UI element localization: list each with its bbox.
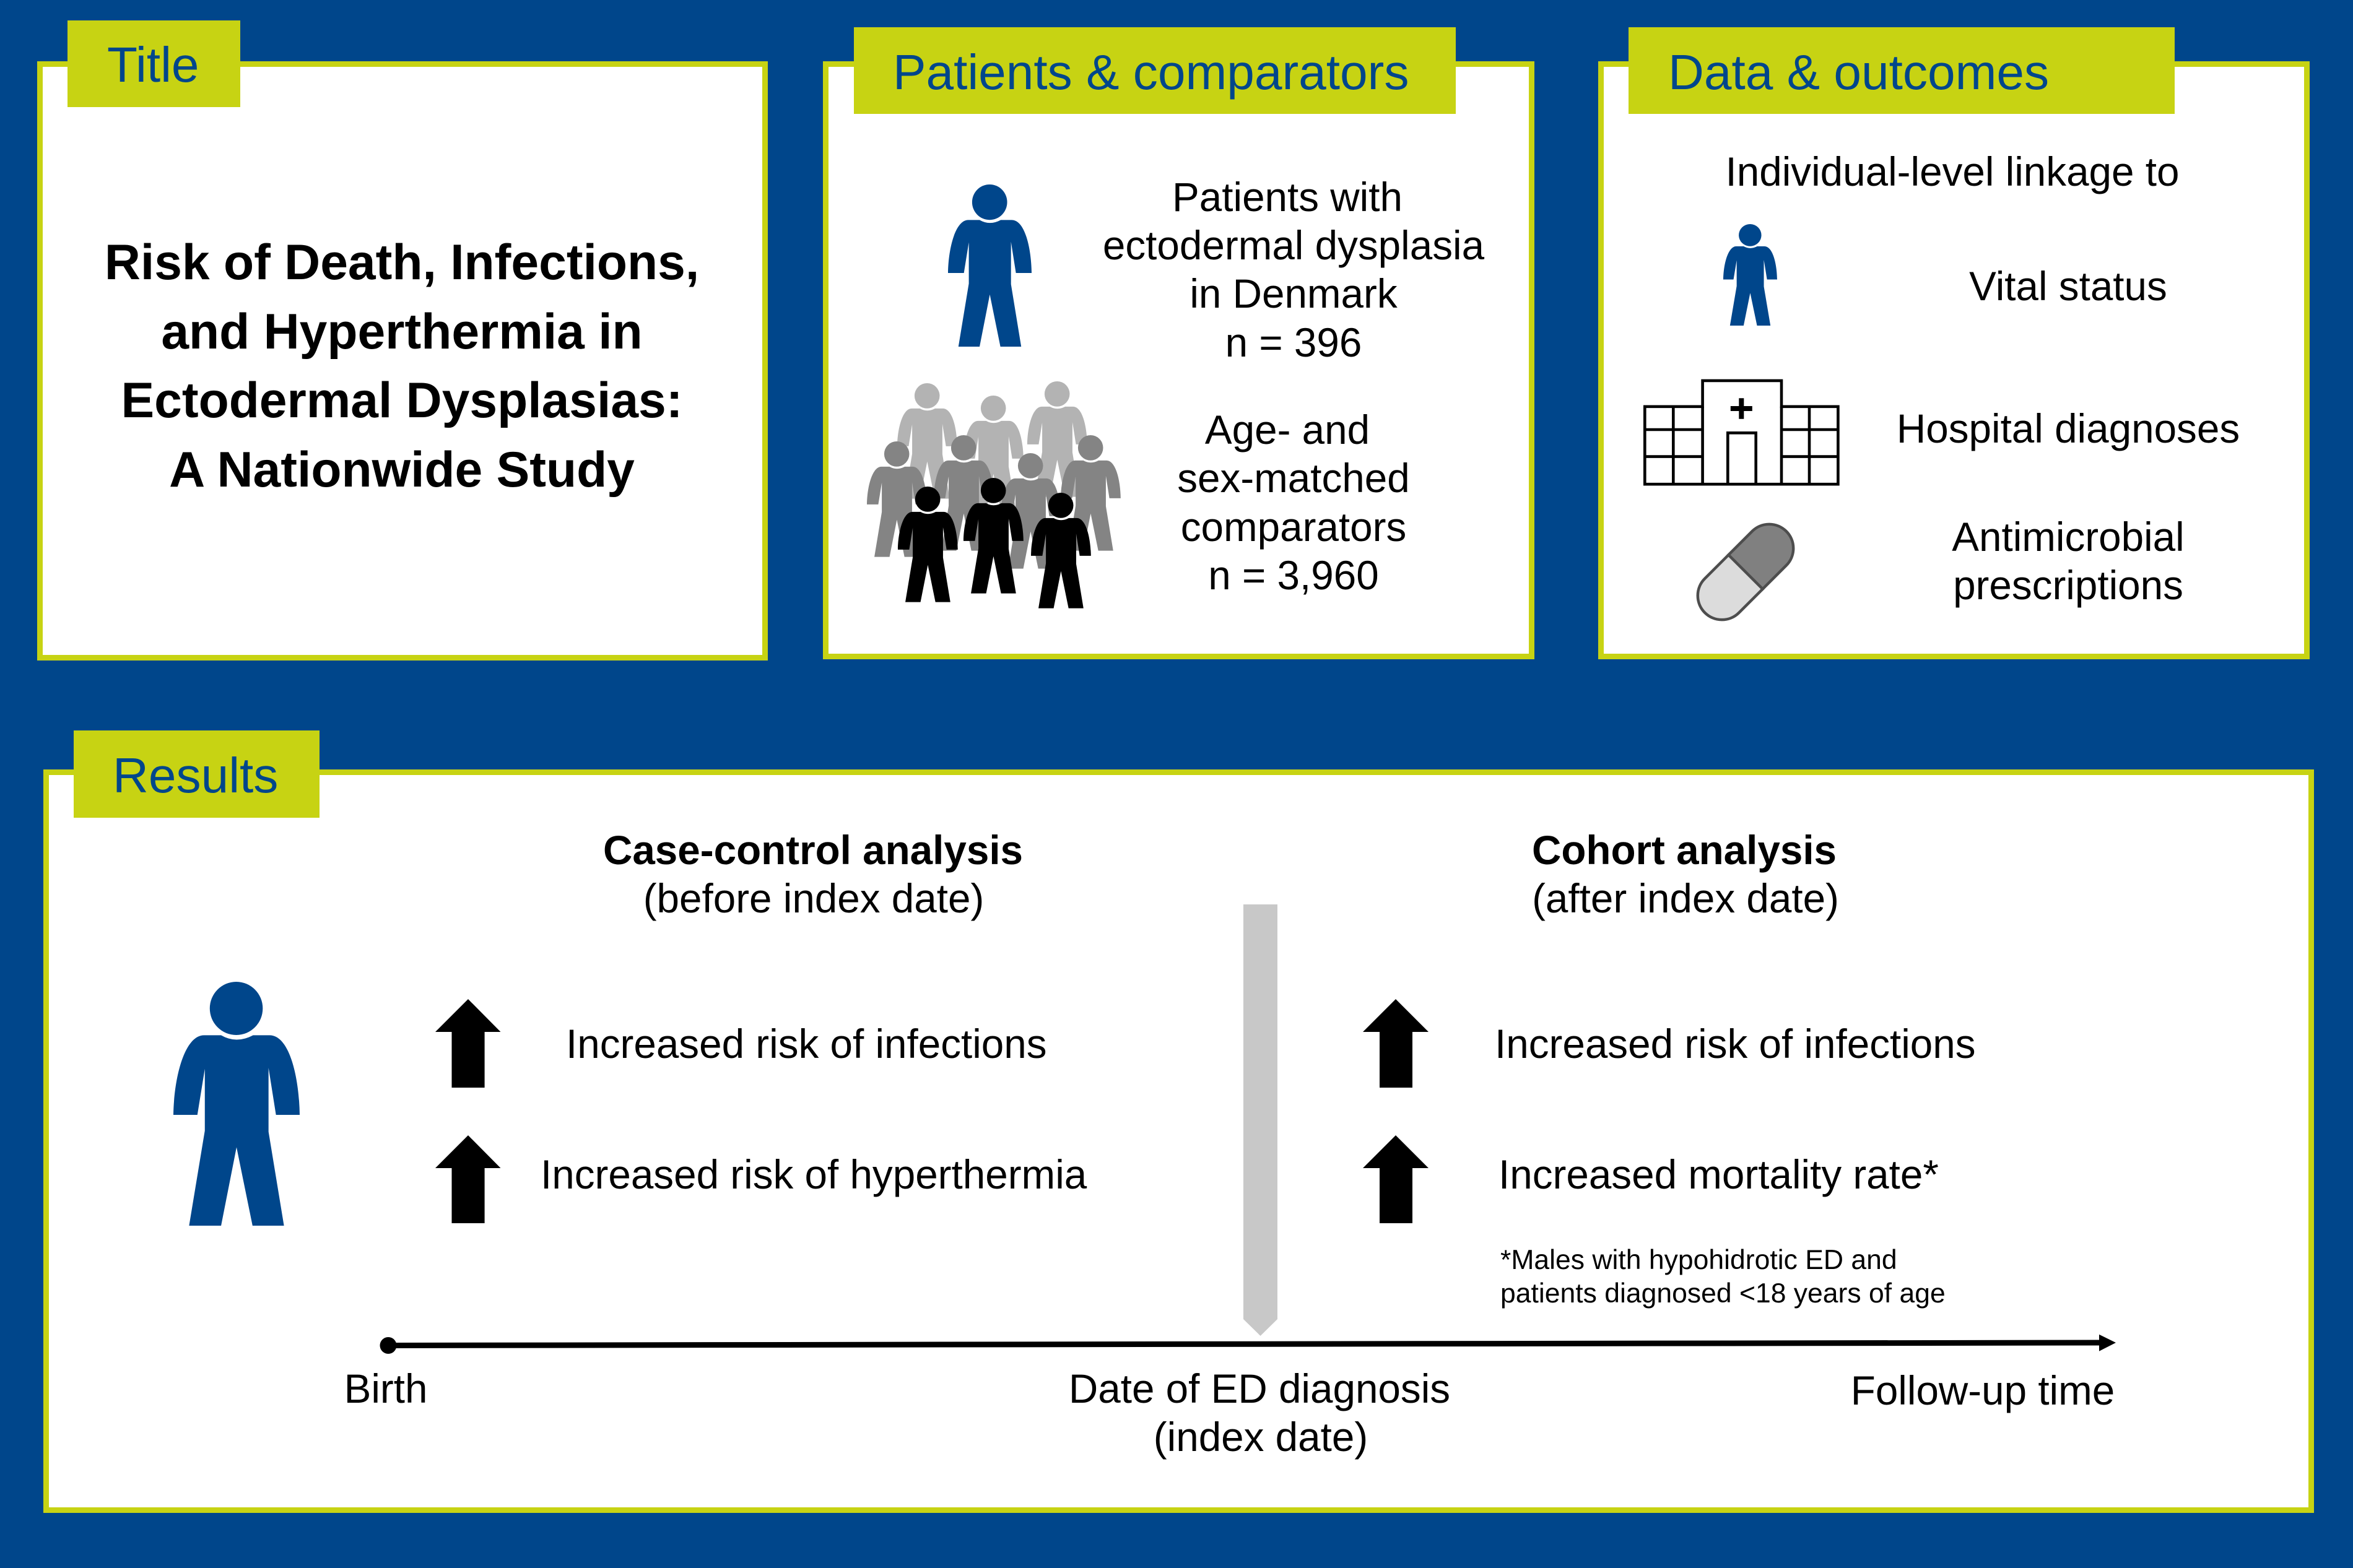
footnote <box>1500 1245 1946 1309</box>
tab: results <box>74 730 320 818</box>
timeline label: index date <box>1069 1366 1450 1460</box>
result: mortality after index: Increased mortality rate* <box>1498 1152 1939 1197</box>
linkage heading: Individual-level linkage to <box>1726 149 2179 194</box>
study title: Ectodermal Dysplasias: <box>121 373 683 428</box>
heading: case-control analysis: Case-control analysis <box>603 828 1023 873</box>
tab: patients and comparators <box>854 27 1456 114</box>
icon: comparator crowd <box>867 381 1121 609</box>
panel: results <box>46 730 2311 1510</box>
timeline label: birth: Birth <box>344 1366 427 1411</box>
tab: data and outcomes <box>1629 27 2175 114</box>
tab: results: Results <box>113 747 278 803</box>
arrow: infections before index <box>435 999 500 1088</box>
footnote: *Males with hypohidrotic ED and <box>1500 1245 1897 1275</box>
hospital diagnoses label: Hospital diagnoses <box>1897 406 2240 451</box>
antimicrobial prescriptions label: prescriptions <box>1953 563 2183 608</box>
footnote: patients diagnosed <18 years of age <box>1500 1278 1946 1309</box>
patients text <box>1103 175 1485 365</box>
timeline label: index date: Date of ED diagnosis <box>1069 1366 1450 1411</box>
icon: patient <box>173 982 300 1226</box>
patients text: n = 396 <box>1225 320 1362 365</box>
tab: title <box>67 20 240 107</box>
timeline label: follow-up: Follow-up time <box>1851 1368 2115 1413</box>
result: infections after index: Increased risk of infections <box>1495 1021 1976 1067</box>
panel: patients and comparators <box>826 27 1532 656</box>
tab: data and outcomes: Data & outcomes <box>1668 44 2049 100</box>
tab: title: Title <box>107 37 199 92</box>
comparators text: n = 3,960 <box>1208 553 1379 598</box>
arrow: mortality after index <box>1363 1135 1429 1223</box>
comparators text: comparators <box>1181 505 1406 550</box>
icon: vital status person <box>1723 224 1777 326</box>
result: hyperthermia before index: Increased risk of hyperthermia <box>541 1152 1087 1197</box>
comparators text <box>1177 407 1410 598</box>
heading: case-control analysis <box>603 828 1023 921</box>
patients text: in Denmark <box>1190 271 1398 316</box>
antimicrobial prescriptions label: Antimicrobial <box>1952 514 2185 560</box>
arrow: infections after index <box>1363 999 1429 1088</box>
arrow: hyperthermia before index <box>435 1135 500 1223</box>
heading: cohort analysis: Cohort analysis <box>1532 828 1837 873</box>
panel: title <box>40 20 765 657</box>
icon: antimicrobial capsule <box>1688 514 1803 630</box>
study title: Risk of Death, Infections, <box>105 235 699 290</box>
vital status label: Vital status <box>1969 264 2167 309</box>
comparators text: Age- and <box>1205 407 1370 453</box>
timeline arrow <box>380 1335 2116 1354</box>
icon: patient <box>948 184 1032 347</box>
tab: patients and comparators: Patients & comparators <box>893 44 1409 100</box>
icon: hospital <box>1645 381 1838 484</box>
patients text: ectodermal dysplasia <box>1103 223 1485 268</box>
heading: cohort analysis <box>1532 828 1839 921</box>
comparators text: sex-matched <box>1177 456 1410 501</box>
antimicrobial prescriptions label <box>1952 514 2185 608</box>
study title <box>105 235 699 498</box>
panel: data and outcomes <box>1601 27 2307 656</box>
patients text: Patients with <box>1172 175 1403 220</box>
timeline label: index date: (index date) <box>1154 1414 1368 1460</box>
study title: and Hyperthermia in <box>161 304 643 360</box>
study title: A Nationwide Study <box>169 442 635 498</box>
heading: case-control analysis: (before index date) <box>643 876 984 921</box>
index date marker <box>1243 904 1277 1336</box>
result: infections before index: Increased risk of infections <box>566 1021 1047 1067</box>
heading: cohort analysis: (after index date) <box>1532 876 1839 921</box>
